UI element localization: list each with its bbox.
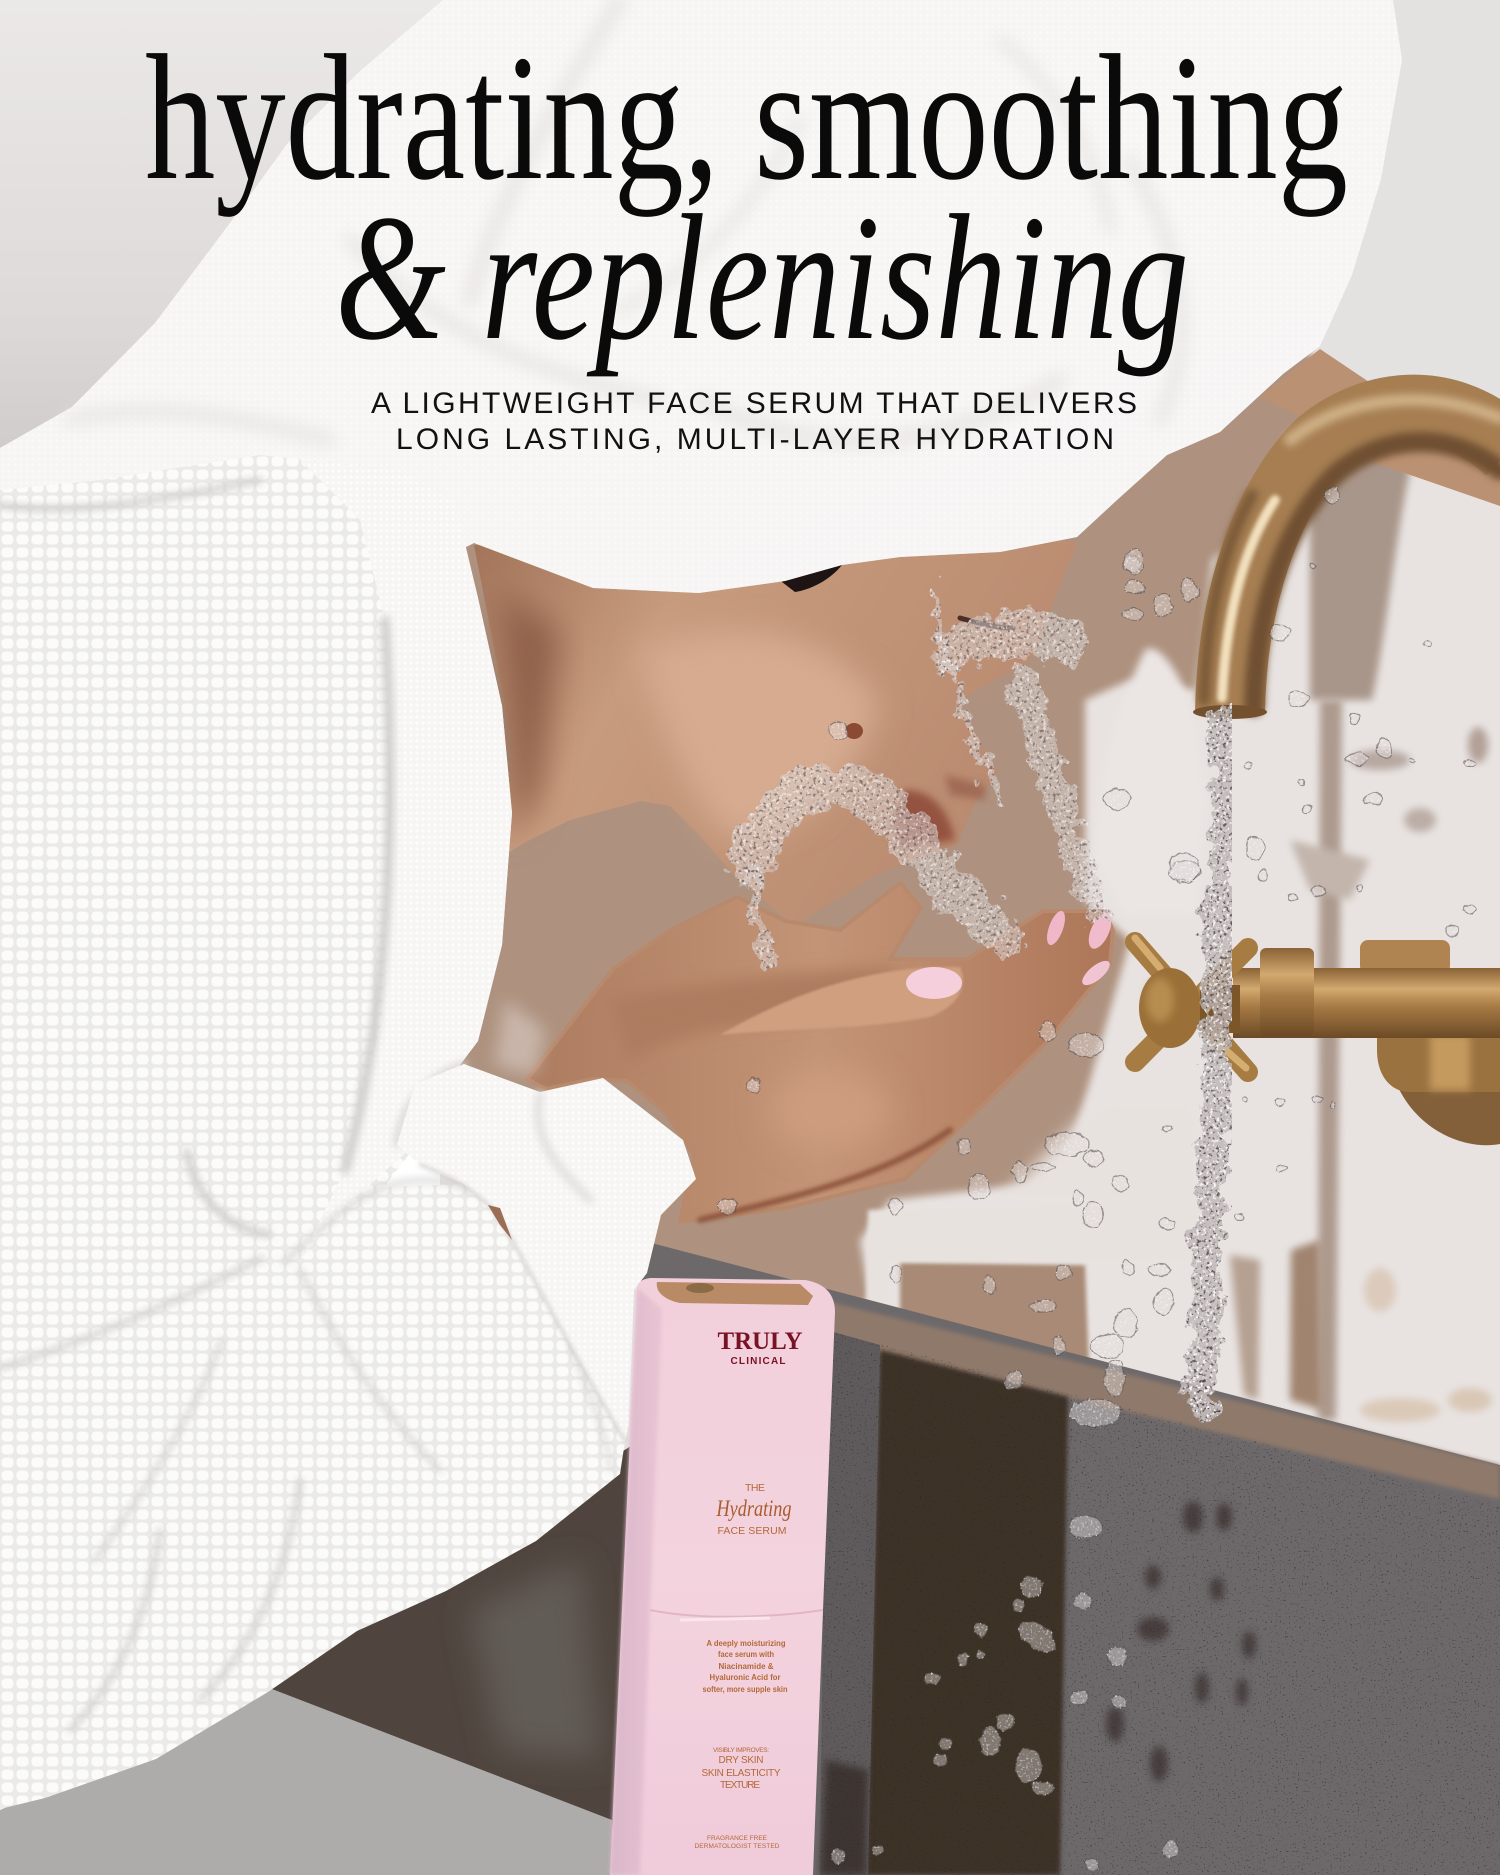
bottle product name: THE (745, 1482, 765, 1494)
horizontal pipe (1233, 968, 1500, 1038)
bottle description: softer, more supple skin (702, 1684, 788, 1694)
subtitle line 1: A LIGHTWEIGHT FACE SERUM THAT DELIVERS (371, 387, 1137, 420)
eye (960, 618, 1012, 628)
fold between the hands (610, 966, 900, 1062)
bottle brand: CLINICAL (730, 1356, 786, 1367)
bottle benefits (702, 1747, 781, 1791)
brass faucet spout (1193, 400, 1500, 719)
bottle product name: Hydrating (716, 1496, 792, 1521)
falling water stream (1182, 722, 1227, 1418)
thumb (720, 967, 963, 1035)
bottle description: Hyaluronic Acid for (710, 1672, 781, 1682)
waffle robe (0, 455, 625, 1809)
collar (1260, 948, 1314, 1036)
nail: thumb (906, 967, 962, 999)
bottle product name: FACE SERUM (718, 1525, 786, 1537)
wall flange (1397, 1060, 1500, 1145)
bottle description: A deeply moisturizing (706, 1638, 786, 1648)
robe collar (300, 460, 512, 1260)
bottle top opening (657, 1282, 813, 1305)
subtitle line 2: LONG LASTING, MULTI-LAYER HYDRATION (396, 423, 1114, 456)
bottle benefits: VISIBLY IMPROVES: (713, 1747, 769, 1754)
title line 2: & replenishing (335, 178, 1189, 377)
sink basin (640, 1240, 1500, 1875)
wall shadows (450, 330, 1492, 1422)
face splash (747, 581, 1095, 962)
mole (845, 723, 863, 739)
elbow (1377, 1025, 1500, 1092)
hands (527, 883, 1116, 1222)
soft blurred robe behind wrist (495, 1000, 545, 1075)
subtitle (371, 387, 1137, 456)
nails: fingertips (1043, 909, 1069, 947)
towel folds (70, 0, 1181, 440)
bottle benefits: DRY SKIN (718, 1755, 764, 1766)
white bath towel (0, 0, 1402, 593)
robe shading folds (0, 480, 610, 1730)
bottle body (610, 1278, 835, 1875)
sink ledge (780, 1290, 1500, 1499)
bottle description: face serum with (718, 1649, 774, 1659)
neck and face (474, 520, 1077, 926)
wet hair (782, 558, 842, 592)
wooden shelf behind faucet (1260, 349, 1500, 506)
lips and mouth (894, 790, 955, 850)
water droplets (719, 487, 1476, 1871)
concrete speckle (820, 1330, 1500, 1875)
dark cast shadow (866, 1350, 1068, 1875)
cross handle (1135, 938, 1248, 1072)
bottle benefits: TEXTURE (720, 1780, 760, 1791)
bottle description (702, 1638, 788, 1694)
nostril (945, 775, 985, 800)
bottle product name (716, 1482, 792, 1537)
terry cuff (397, 1064, 696, 1441)
pale counter top (0, 1689, 612, 1875)
bottle brand: TRULY (718, 1328, 802, 1355)
bottle claims: FRAGRANCE FREE (707, 1835, 768, 1842)
bottle brand (718, 1328, 802, 1367)
title (145, 18, 1348, 377)
bottle claims (694, 1835, 780, 1850)
product bottle (610, 1278, 835, 1875)
brass tap and pipes (1135, 938, 1500, 1145)
bottle claims: DERMATOLOGIST TESTED (694, 1843, 780, 1850)
palm highlight (770, 1070, 890, 1150)
bottle benefits: SKIN ELASTICITY (702, 1768, 781, 1779)
bottle description: Niacinamide & (718, 1661, 774, 1671)
bottle wet side face (610, 1288, 662, 1875)
dark sink recess under the sleeve (240, 1440, 640, 1840)
top bracket (1360, 940, 1450, 974)
bottle seam (650, 1610, 823, 1617)
